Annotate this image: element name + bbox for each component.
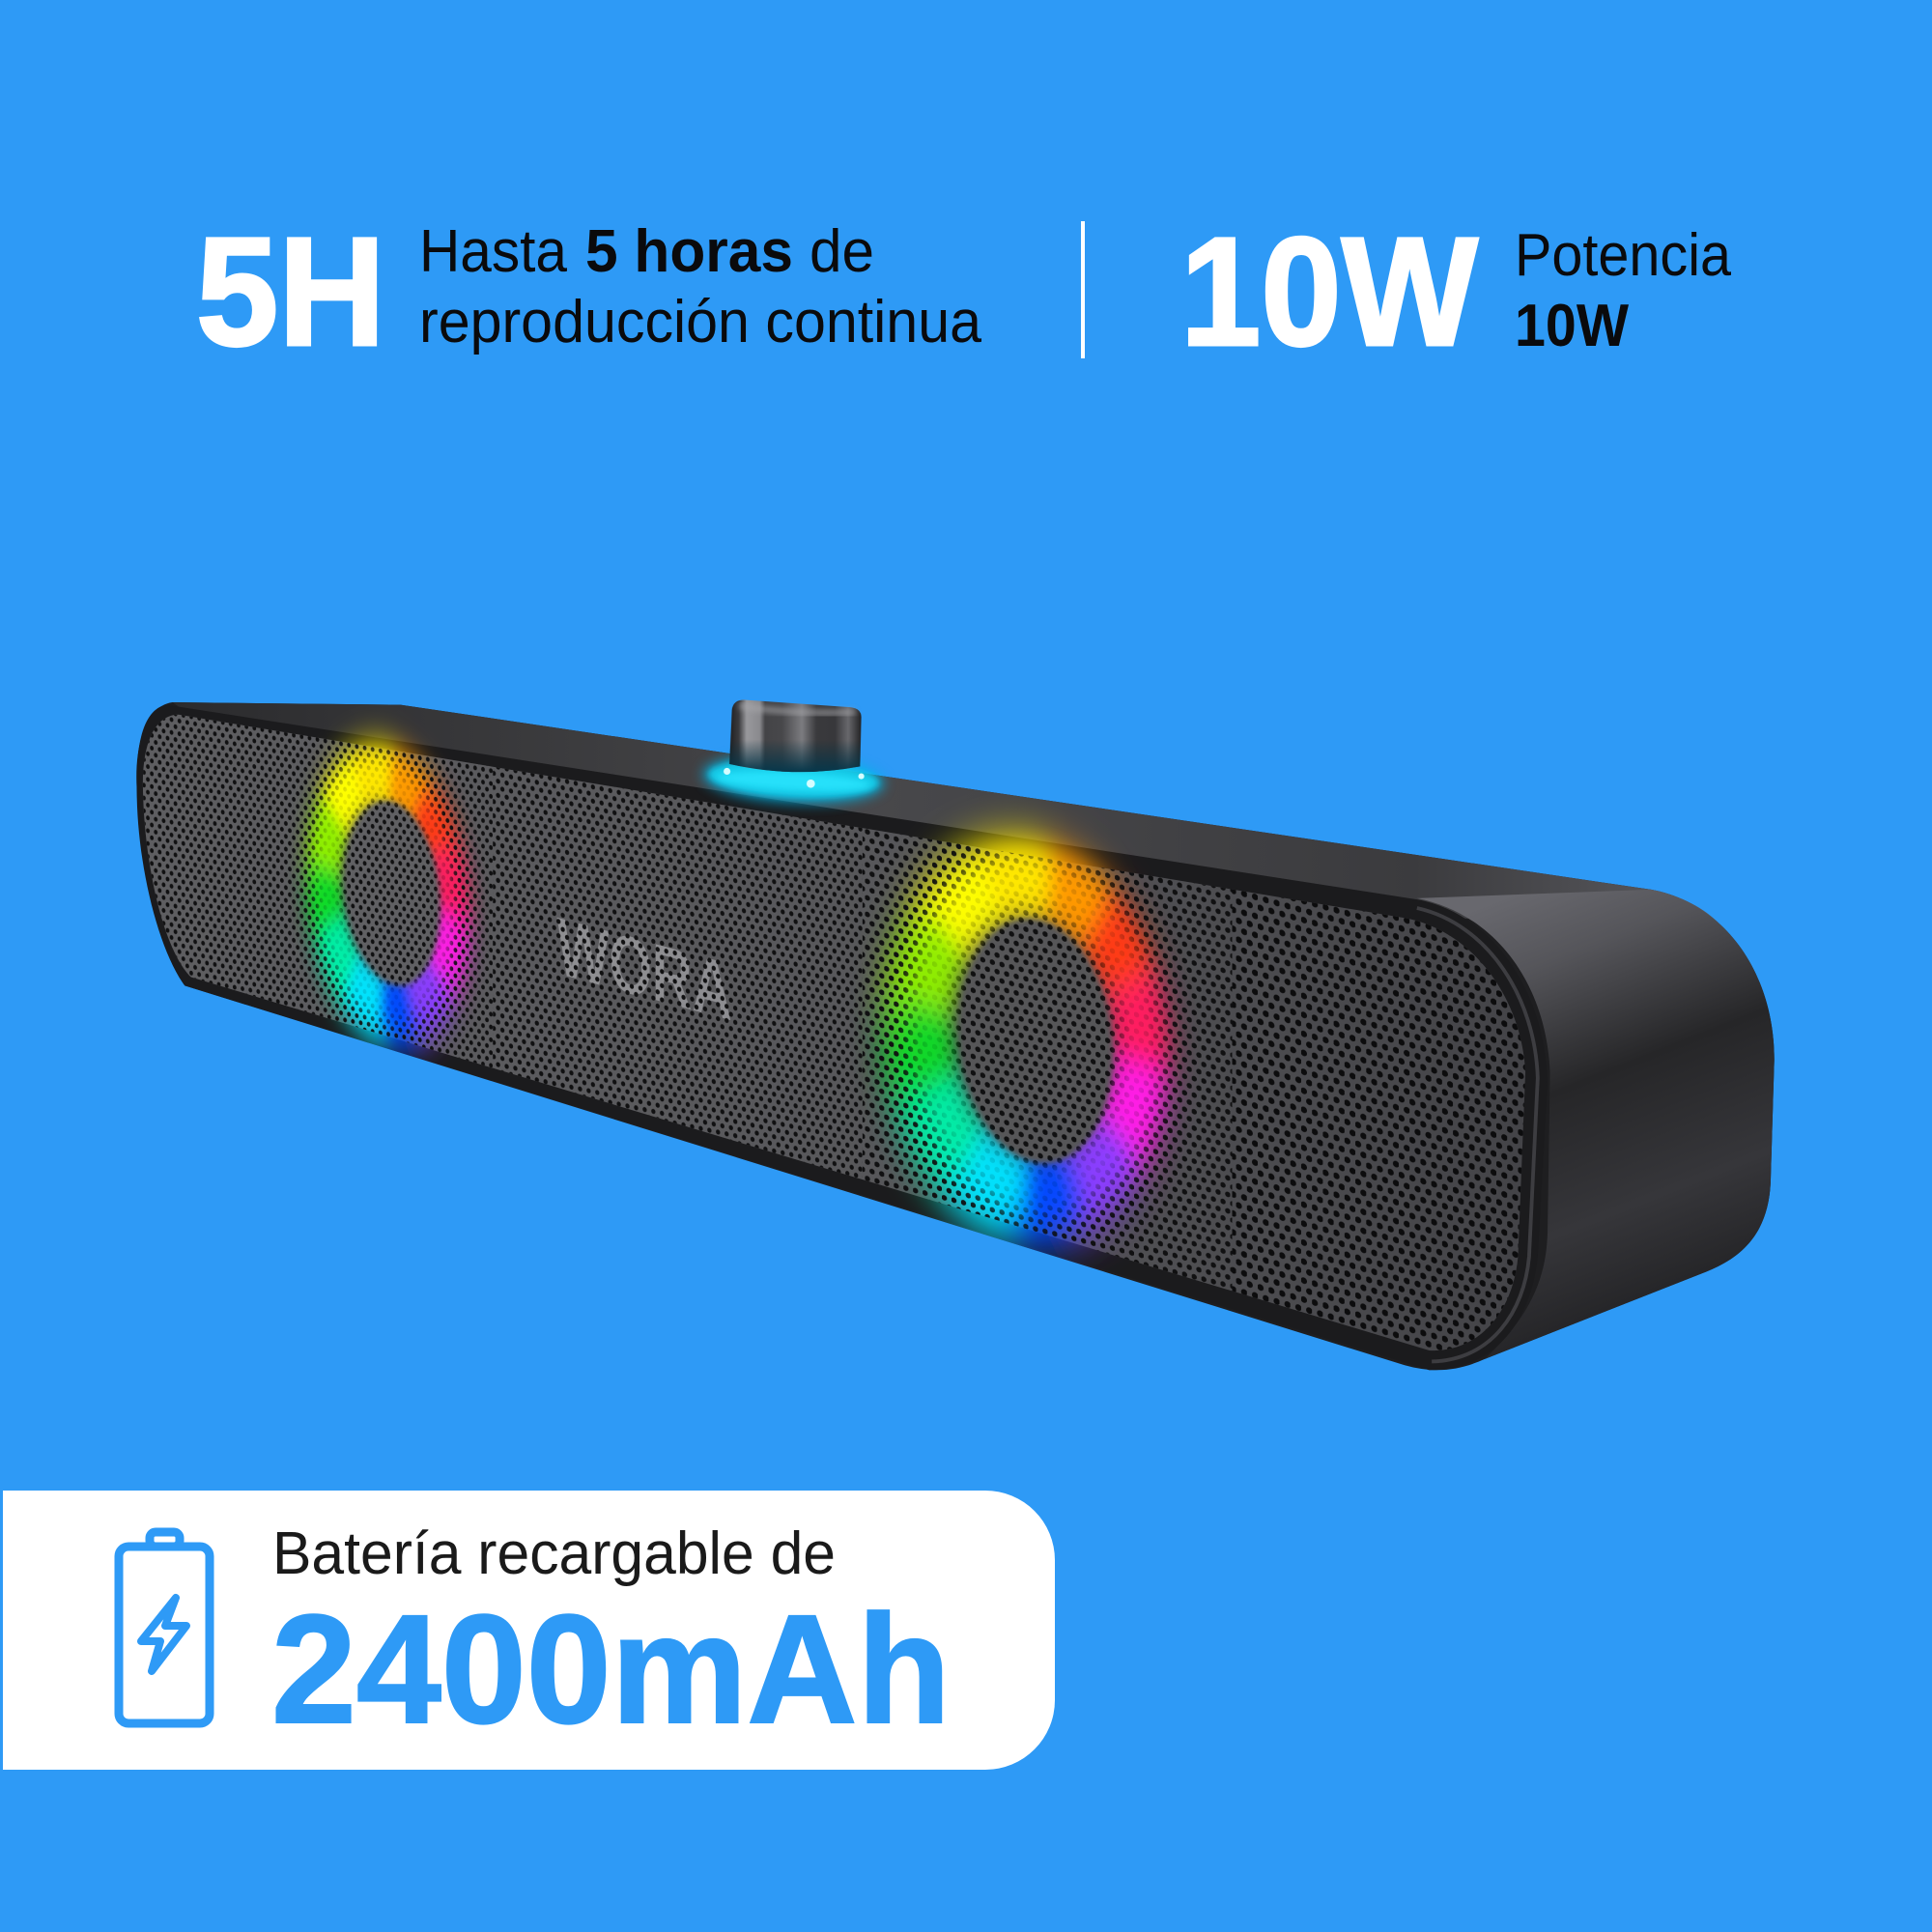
card background	[3, 1491, 1055, 1770]
stat: 5H playback	[196, 205, 981, 378]
grille logo: WORA	[557, 900, 732, 1038]
left speaker disc	[335, 795, 450, 991]
speaker grille	[143, 715, 1525, 1350]
right end cap	[1417, 890, 1775, 1359]
top surface	[173, 702, 1725, 930]
knob cap	[739, 706, 855, 713]
RGB outer glow	[309, 764, 1158, 1220]
speaker soundbar	[124, 690, 1775, 1380]
stat: 10W power	[1180, 205, 1731, 378]
left ring glow	[309, 764, 468, 1028]
battery capacity: 2400mAh	[271, 1582, 951, 1755]
playback description: 5 horas	[585, 218, 793, 285]
speaker body	[136, 702, 1775, 1370]
power description	[1515, 222, 1731, 359]
knob bottom reflection	[729, 699, 862, 772]
icon: battery	[119, 1532, 210, 1723]
power description: Potencia	[1515, 222, 1731, 289]
battery label: Batería recargable de	[272, 1520, 836, 1587]
volume knob	[701, 699, 886, 809]
playback description: reproducción continua	[419, 289, 981, 355]
playback description	[419, 218, 981, 355]
big number 5H: 5H	[196, 205, 385, 378]
knob sparkles	[724, 768, 865, 788]
right ring bright	[915, 871, 1155, 1199]
knob cylinder	[729, 699, 862, 772]
big number 10W: 10W	[1180, 205, 1478, 378]
right ring glow	[893, 863, 1158, 1220]
icon: lightning bolt	[141, 1598, 186, 1671]
right speaker disc	[948, 911, 1125, 1172]
infographic canvas	[3, 221, 1775, 1770]
battery card	[3, 1491, 1055, 1770]
RGB bright rings	[317, 774, 1155, 1199]
playback description: de	[810, 218, 874, 285]
divider	[1081, 221, 1085, 358]
left ring bright	[317, 774, 452, 1006]
perforation dots	[143, 715, 1525, 1350]
knob light ring	[701, 750, 886, 809]
front bezel	[136, 705, 1548, 1370]
playback description: Hasta	[419, 218, 567, 285]
bezel highlight	[1417, 908, 1538, 1361]
power description: 10W	[1515, 293, 1629, 359]
